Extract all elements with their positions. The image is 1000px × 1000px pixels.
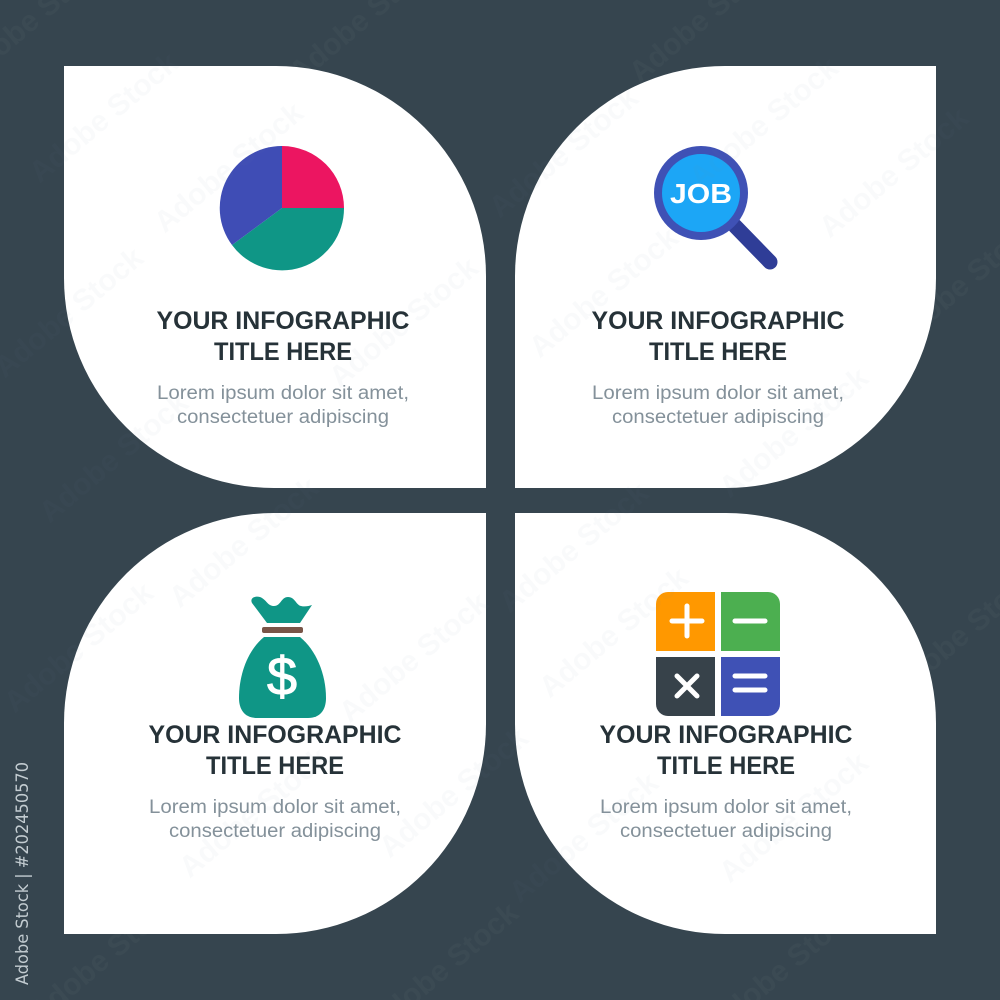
watermark: Adobe Stock (163, 471, 325, 614)
heading: top left (156, 307, 410, 366)
watermark: Adobe Stock (683, 51, 845, 194)
watermark: Adobe Stock (713, 361, 875, 504)
panel: bottom right (515, 513, 936, 934)
watermark: Adobe Stock (523, 221, 685, 364)
heading: bottom right: YOUR INFOGRAPHIC (600, 721, 852, 749)
watermark: Adobe Stock (173, 741, 335, 884)
watermark: Adobe Stock (0, 576, 160, 719)
stock id label: Adobe Stock | #202450570 (13, 762, 33, 985)
watermark: Adobe Stock (483, 81, 645, 224)
watermark: Adobe Stock (533, 561, 695, 704)
text block: top right (592, 383, 844, 428)
heading: bottom left: YOUR INFOGRAPHIC (148, 721, 402, 749)
heading: top right: TITLE HERE (649, 338, 787, 366)
heading: top left: YOUR INFOGRAPHIC (156, 307, 410, 335)
heading: top right (592, 307, 844, 366)
watermark: Adobe Stock (373, 721, 535, 864)
panel: top right (515, 66, 936, 488)
watermark: Adobe Stock (493, 476, 655, 619)
watermark: Adobe Stock (23, 46, 185, 189)
text block: bottom right: Lorem ipsum dolor sit amet, (600, 797, 852, 818)
text block: top left: consectetuer adipiscing (177, 407, 389, 428)
watermark: Adobe Stock (813, 101, 975, 244)
icon: money bag: $ (267, 647, 297, 707)
heading: top right: YOUR INFOGRAPHIC (592, 307, 844, 335)
text block: bottom right (600, 797, 852, 842)
heading: bottom left: TITLE HERE (206, 752, 344, 780)
watermark: Adobe Stock (503, 766, 665, 909)
watermark: Adobe Stock (713, 746, 875, 889)
panel: bottom left (64, 513, 486, 934)
icon: job search magnifier (654, 146, 770, 262)
watermark: Adobe Stock (148, 96, 310, 239)
icon: money bag (239, 597, 326, 718)
heading: bottom left (148, 721, 402, 780)
heading: bottom right: TITLE HERE (657, 752, 795, 780)
text block: bottom left: consectetuer adipiscing (169, 821, 381, 842)
icon: calculator (656, 592, 780, 716)
text block: top right: Lorem ipsum dolor sit amet, (592, 383, 844, 404)
text block: bottom right: consectetuer adipiscing (620, 821, 832, 842)
heading: top left: TITLE HERE (214, 338, 352, 366)
watermark: Adobe Stock (333, 586, 495, 729)
text block: bottom left: Lorem ipsum dolor sit amet, (149, 797, 401, 818)
text block: top right: consectetuer adipiscing (612, 407, 824, 428)
text block: top left (157, 383, 409, 428)
text block: top left: Lorem ipsum dolor sit amet, (157, 383, 409, 404)
heading: bottom right (600, 721, 852, 780)
watermark: Adobe Stock (323, 251, 485, 394)
text block: bottom left (149, 797, 401, 842)
icon: pie chart (220, 146, 344, 270)
watermark: Adobe Stock (33, 386, 195, 529)
panel: top left (64, 66, 486, 488)
icon: job search magnifier: JOB (670, 178, 732, 209)
